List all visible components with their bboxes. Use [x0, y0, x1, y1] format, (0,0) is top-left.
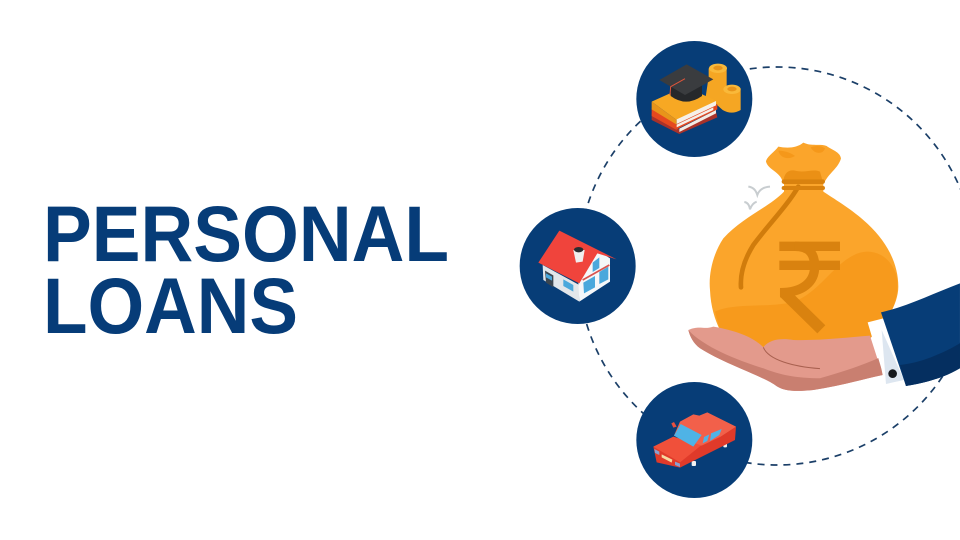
car body [653, 412, 736, 468]
graduation cap [659, 64, 713, 102]
windows [563, 257, 608, 293]
bag shadow [715, 252, 897, 352]
dashed orbit ring [578, 67, 960, 465]
shirt cuff [868, 318, 904, 384]
coin stacks [705, 64, 741, 113]
suit sleeve [881, 283, 960, 386]
lights [662, 454, 672, 463]
hand [688, 327, 883, 391]
icon: home loan [520, 208, 636, 324]
roof [538, 231, 617, 283]
chimney [573, 247, 585, 263]
title: Personal Loans: PERSONAL [43, 189, 449, 278]
title: Personal Loans: LOANS [43, 261, 298, 350]
illustration: money bag on hand [688, 143, 960, 391]
books [652, 87, 718, 134]
title: Personal Loans [43, 189, 449, 350]
bag body [710, 180, 898, 352]
icon: rupee symbol [779, 246, 840, 329]
door [545, 271, 553, 287]
walls [543, 265, 579, 302]
bag top ruffle [766, 143, 841, 190]
wheels [692, 461, 696, 466]
mirror [671, 422, 677, 428]
birds [744, 187, 770, 209]
icon: car loan [636, 382, 752, 498]
windows [674, 424, 722, 447]
icon: education loan [636, 41, 752, 157]
drawstring [741, 187, 798, 287]
